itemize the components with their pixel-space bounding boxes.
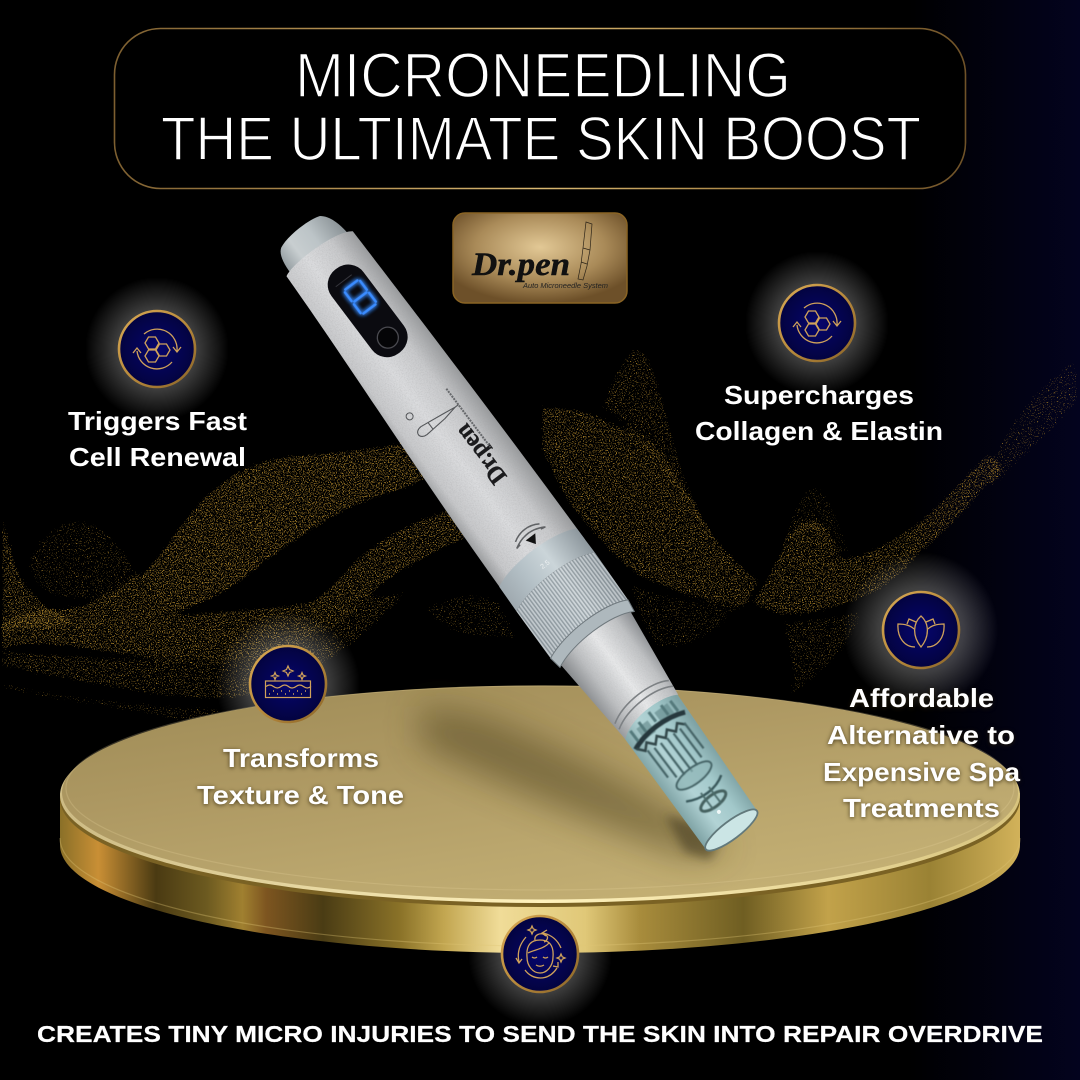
pen body (270, 224, 586, 598)
Dr.pen logo badge (453, 213, 627, 303)
label: triggers fast cell renewal (68, 406, 247, 472)
icon: honeycomb renewal (119, 311, 195, 387)
title line 1: MICRONEEDLING (295, 41, 791, 111)
engraved tagline strip (446, 389, 490, 447)
gold dust waves (0, 347, 1080, 735)
label: affordable alternative (823, 683, 1021, 823)
label: triggers fast cell renewal: Triggers Fast (68, 406, 247, 436)
title panel (114, 28, 966, 188)
label: supercharges collagen and elastin: Collagen & Elastin (695, 416, 943, 446)
pen cap (272, 207, 349, 276)
label: triggers fast cell renewal: Cell Renewal (69, 442, 246, 472)
engraved mini pen (415, 401, 461, 439)
icon: face with towel (502, 916, 578, 992)
tapered cone (549, 597, 692, 744)
title line 2: THE ULTIMATE SKIN BOOST (161, 105, 921, 174)
power button (373, 323, 403, 352)
logo tagline: Auto Microneedle System (522, 281, 608, 290)
icon glows (85, 251, 999, 1026)
logo pen sketch (578, 222, 592, 280)
label: transforms texture and tone: Texture & Tone (197, 780, 404, 810)
icon: collagen honeycomb (779, 285, 855, 361)
label: affordable alternative: Affordable (849, 683, 994, 713)
gold podium disc (60, 686, 1020, 953)
needle cartridge (614, 685, 764, 851)
engraved Dr.pen text: Dr.pen (450, 419, 512, 489)
knurled dial (510, 545, 630, 658)
display window (320, 257, 415, 365)
icon: skin layers with sparkles (250, 646, 326, 722)
label: transforms texture and tone (197, 743, 404, 810)
depth arrow marker (510, 518, 545, 549)
label: supercharges collagen and elastin: Supercharges (724, 380, 914, 410)
pen shadow on disc (420, 705, 730, 858)
cartridge tip (700, 804, 762, 856)
label: affordable alternative: Treatments (843, 793, 1000, 823)
bottom caption: CREATES TINY MICRO INJURIES TO SEND THE SKIN INTO REPAIR OVERDRIVE (37, 1021, 1043, 1047)
microneedling pen: 2.5 (539, 559, 552, 571)
label: transforms texture and tone: Transforms (223, 743, 379, 773)
logo wordmark: Dr.pen (471, 247, 570, 283)
icon: lotus (883, 592, 959, 668)
depth collar (493, 521, 595, 611)
label: affordable alternative: Alternative to (827, 720, 1015, 750)
label: affordable alternative: Expensive Spa (823, 757, 1021, 787)
microneedling pen (253, 203, 784, 862)
LED digit (344, 279, 377, 315)
label: supercharges collagen and elastin (695, 380, 943, 446)
registered mark (405, 411, 415, 421)
dial base ring (545, 593, 636, 669)
